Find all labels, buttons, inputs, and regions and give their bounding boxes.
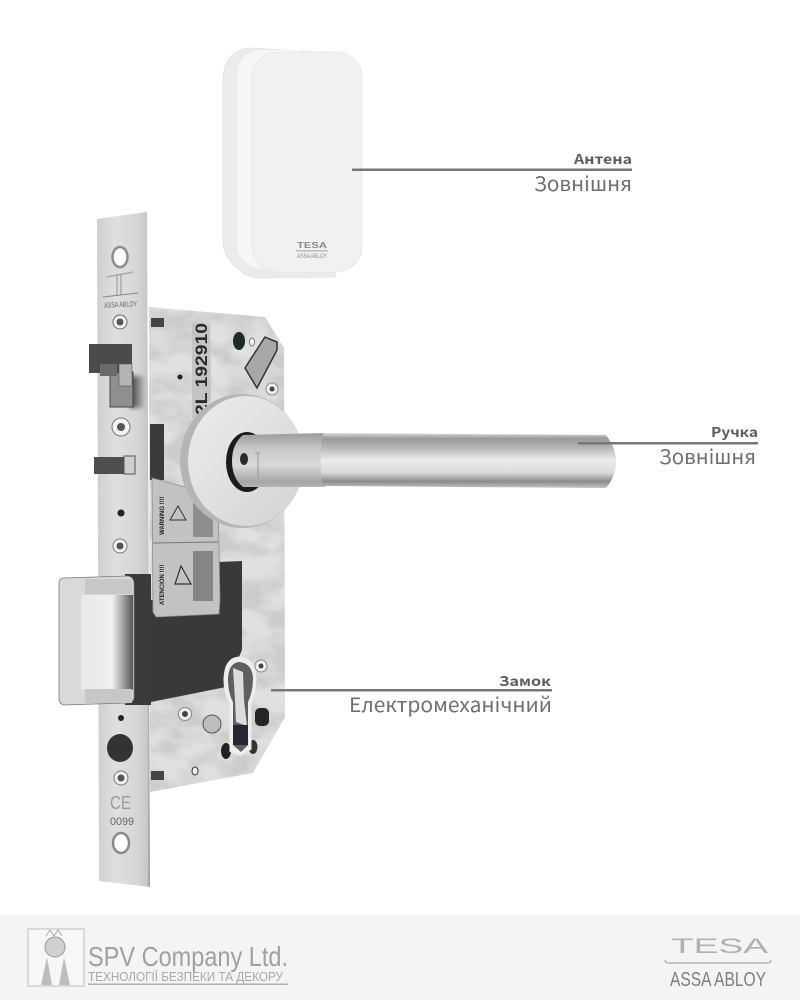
faceplate logo: ASSA ABLOY: [104, 299, 137, 310]
warning labels: ATENCIÓN !!!!: [158, 564, 166, 605]
deadbolt: [59, 574, 151, 705]
upper latch: [89, 344, 146, 408]
footer band: [0, 915, 800, 1000]
TESA logo: [665, 935, 771, 991]
SPV logo: [28, 929, 288, 986]
cylinder keyhole: [226, 659, 254, 753]
serial number label: 2L 192910: [192, 323, 211, 415]
faceplate screws and holes: [107, 315, 133, 853]
TESA logo: ASSA ABLOY: [670, 969, 766, 991]
TESA logo: TESA: [671, 935, 768, 958]
SPV logo: ТЕХНОЛОГІЇ БЕЗПЕКИ ТА ДЕКОРУ: [88, 969, 284, 984]
callout: lock: Замок: [499, 670, 552, 690]
callout: handle: Зовнішня: [659, 441, 756, 470]
CE mark: CE: [110, 793, 131, 813]
antenna TESA logo: TESA: [297, 240, 327, 250]
antenna TESA logo: [296, 240, 328, 260]
handle: [232, 433, 616, 488]
faceplate: [97, 212, 150, 887]
callout: lock: Електромеханічний: [349, 689, 552, 718]
0099: 0099: [110, 816, 134, 828]
antenna device: [223, 48, 362, 278]
antenna TESA logo: ASSA ABLOY: [297, 253, 327, 260]
rosette: [180, 394, 304, 528]
warning labels: WARNING !!!!: [160, 496, 166, 535]
callout: antenna: Зовнішня: [534, 168, 632, 197]
callout: handle: [578, 421, 758, 470]
callout: lock: [271, 670, 552, 718]
faceplate logo: [103, 247, 138, 310]
case mechanism details: [151, 318, 278, 780]
callout: antenna: [352, 148, 632, 197]
callout: handle: Ручка: [711, 421, 758, 441]
SPV logo: SPV Company Ltd.: [88, 941, 288, 972]
black panels: [150, 424, 164, 480]
small latch: [94, 456, 135, 474]
callout: antenna: Антена: [573, 148, 632, 168]
lock case: [149, 307, 285, 792]
warning labels: [152, 478, 220, 617]
